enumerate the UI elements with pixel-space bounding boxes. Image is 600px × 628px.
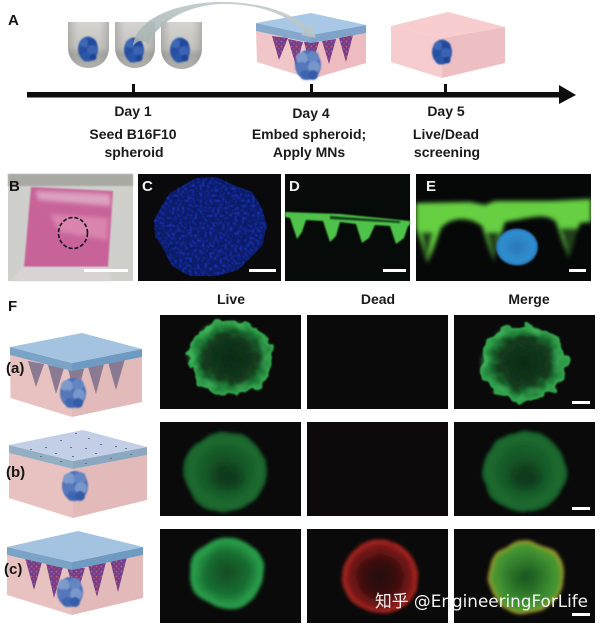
column heading: Dead: Dead xyxy=(361,291,395,307)
label: day 4: Embed spheroid; xyxy=(252,126,366,142)
micrograph: row b live xyxy=(160,422,301,516)
label: day 1 xyxy=(89,103,177,160)
micrograph: row a dead xyxy=(307,315,448,409)
label: day 5: screening xyxy=(414,144,480,160)
panel E: needles and spheroid xyxy=(416,174,591,281)
label: day 1: spheroid xyxy=(104,144,164,160)
micrograph: row a merge xyxy=(454,315,595,409)
label: day 5 xyxy=(413,103,480,160)
panel A: experiment timeline xyxy=(8,2,576,160)
panel letter F: F xyxy=(8,298,17,315)
panel letter B: B xyxy=(9,178,20,195)
scale bar E xyxy=(569,269,586,272)
micrograph: row a live xyxy=(160,315,301,409)
schematic a: blank microneedle patch xyxy=(6,333,142,417)
blue speckled spheroid xyxy=(154,177,267,276)
panel C: blue spheroid micrograph xyxy=(138,174,281,281)
scale bar xyxy=(572,507,590,510)
icon: transfer arc arrow xyxy=(133,2,316,46)
label: day 1: Day 1 xyxy=(114,103,152,119)
schematic b: drug loaded film xyxy=(6,430,147,518)
icon: three culture wells with spheroids xyxy=(68,22,202,69)
label: day 5: Live/Dead xyxy=(413,126,479,142)
column heading: Live: Live xyxy=(217,291,245,307)
panel letter E: E xyxy=(426,178,436,195)
watermark: 知乎 @EngineeringForLife xyxy=(375,592,588,612)
micrograph: row b merge xyxy=(454,422,595,516)
panel letter C: C xyxy=(142,178,153,195)
schematic c: drug loaded microneedles xyxy=(4,531,143,615)
column heading: Merge: Merge xyxy=(508,291,550,307)
scale bar B xyxy=(84,269,128,272)
label: day 5: Day 5 xyxy=(427,103,465,119)
green needles xyxy=(285,212,410,244)
label: day 4: Apply MNs xyxy=(273,144,345,160)
micrograph: row b dead xyxy=(307,422,448,516)
panel letter A: A xyxy=(8,12,19,29)
scale bar D xyxy=(383,269,406,272)
panel B: photo of patch xyxy=(8,174,133,281)
film particles xyxy=(30,433,132,464)
micrograph: row c dead xyxy=(307,529,448,623)
scale bar xyxy=(572,613,590,616)
label a: (a) xyxy=(6,360,24,377)
label b: (b) xyxy=(6,464,25,481)
green needle array xyxy=(416,199,591,263)
micrograph: row c live xyxy=(160,529,301,623)
scale bar xyxy=(572,401,590,404)
blue spheroid xyxy=(496,228,538,266)
label: day 4: Day 4 xyxy=(292,105,330,121)
timeline arrow with ticks xyxy=(27,84,576,104)
panel D: green microneedle side view xyxy=(285,174,410,281)
label: day 4 xyxy=(252,105,366,160)
icon: hydrogel block with spheroid xyxy=(391,12,505,78)
micrograph: row c merge xyxy=(454,529,595,623)
dashed circle marker xyxy=(58,218,88,248)
scale bar C xyxy=(249,269,276,272)
panel letter D: D xyxy=(289,178,300,195)
label: day 1: Seed B16F10 xyxy=(89,126,177,142)
icon: hydrogel block with microneedle patch xyxy=(256,13,366,80)
label c: (c) xyxy=(4,561,22,578)
